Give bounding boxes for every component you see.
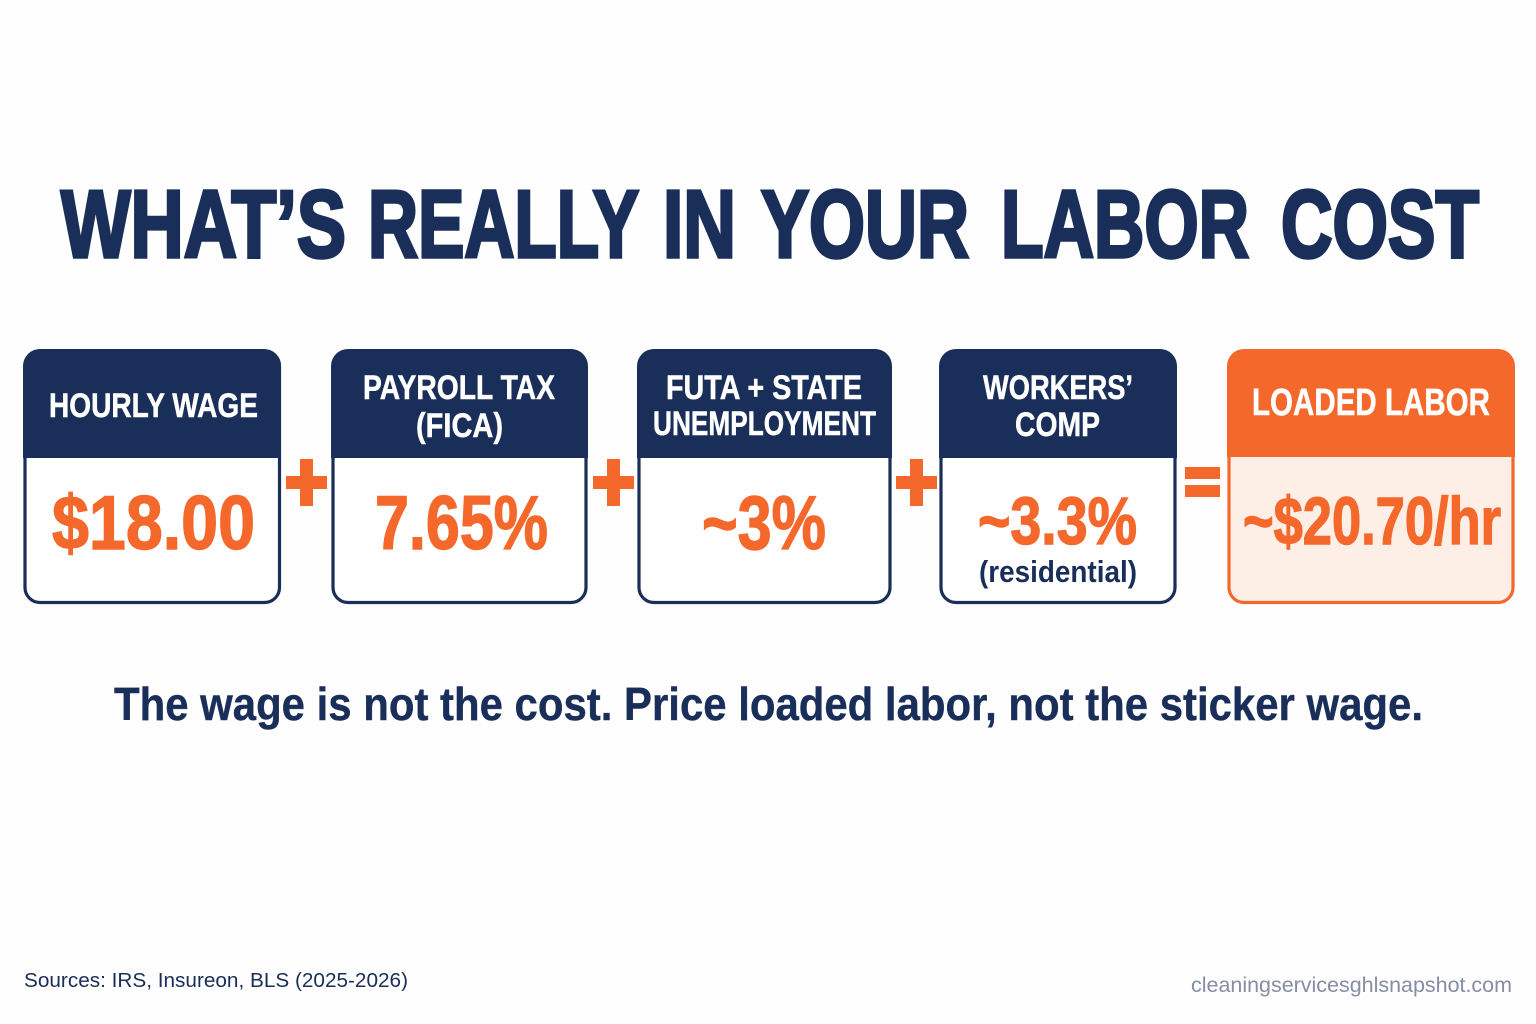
header: workers comp bbox=[939, 349, 1177, 458]
panel: hourly wage bbox=[23, 349, 281, 602]
header: payroll tax bbox=[331, 349, 588, 458]
label: comp: COMP bbox=[1015, 406, 1100, 444]
title: WHAT’S bbox=[61, 171, 346, 278]
icon: plus 1 bbox=[286, 459, 327, 506]
icon: equals bbox=[1185, 467, 1220, 497]
value: ~3.3%: ~3.3% bbox=[978, 484, 1137, 559]
panel: workers comp bbox=[939, 349, 1177, 602]
label: FUTA + state: FUTA + STATE bbox=[666, 369, 862, 407]
header: FUTA bbox=[637, 349, 892, 458]
title: IN bbox=[663, 171, 736, 278]
title: YOUR bbox=[761, 171, 969, 278]
panel: payroll tax bbox=[331, 349, 588, 602]
tagline: The wage is not the cost. Price loaded labor, not the sticker wage. bbox=[114, 678, 1423, 730]
label: workers: WORKERS’ bbox=[983, 369, 1133, 407]
header: loaded labor bbox=[1227, 349, 1515, 457]
sources: Sources: IRS, Insureon, BLS (2025-2026) bbox=[24, 970, 408, 992]
value: 7.65%: 7.65% bbox=[375, 481, 548, 566]
title bbox=[61, 171, 1479, 278]
note: residential: (residential) bbox=[979, 554, 1137, 589]
panel: loaded labor bbox=[1227, 349, 1515, 602]
website: cleaningservicesghlsnapshot.com bbox=[1191, 974, 1512, 997]
label: unemployment: UNEMPLOYMENT bbox=[653, 405, 876, 443]
panel: FUTA and state unemployment bbox=[637, 349, 892, 602]
title: LABOR bbox=[1001, 171, 1249, 278]
label: payroll tax: PAYROLL TAX bbox=[363, 369, 555, 407]
label: FICA: (FICA) bbox=[416, 407, 503, 445]
icon: plus 3 bbox=[896, 459, 937, 506]
title: REALLY bbox=[368, 171, 639, 278]
header: hourly wage bbox=[23, 349, 281, 458]
value: ~3%: ~3% bbox=[702, 481, 826, 566]
value: $18.00: $18.00 bbox=[52, 481, 255, 566]
label: hourly wage: HOURLY WAGE bbox=[49, 387, 258, 425]
icon: plus 2 bbox=[593, 459, 634, 506]
